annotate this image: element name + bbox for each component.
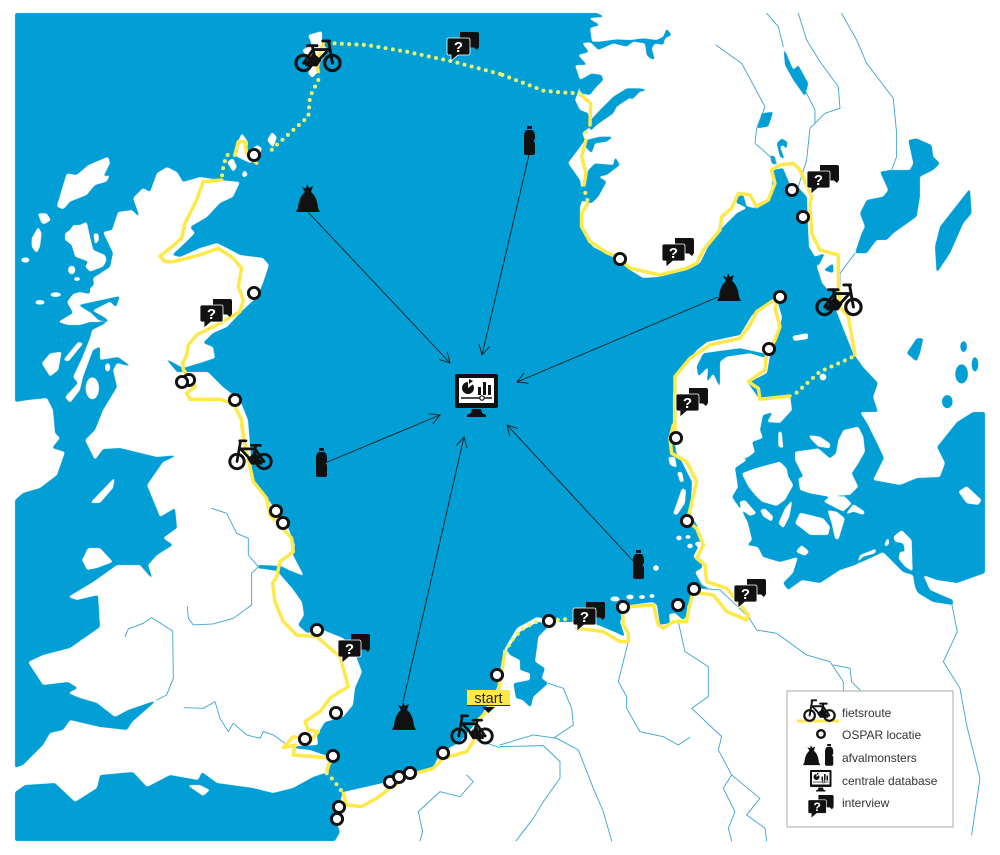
arrow: north-west bag	[307, 211, 450, 363]
icon: interview north: ?	[454, 39, 463, 56]
cycling route	[160, 43, 855, 807]
icon: interview Sweden	[807, 165, 839, 194]
icon: bag north-west	[296, 184, 320, 212]
land: Ireland	[15, 398, 65, 500]
arrow: east bag	[517, 297, 718, 382]
icon: interview Netherlands	[573, 602, 605, 631]
bike icons	[230, 41, 861, 743]
start label: start	[474, 691, 503, 707]
legend: centrale database	[810, 770, 938, 792]
OSPAR locations	[176, 149, 809, 825]
arrow: north bottle	[482, 155, 529, 355]
icon: bike Sweden	[817, 285, 861, 315]
start label	[467, 690, 510, 713]
land: Great Britain	[15, 167, 362, 802]
water: fjords, lakes and inlets	[580, 28, 978, 408]
legend: interview: interview	[842, 796, 890, 810]
legend	[787, 691, 953, 827]
land: Norway and Sweden	[568, 13, 985, 485]
waste sample icons	[296, 126, 741, 730]
arrow: west bottle	[325, 415, 440, 463]
route: Denmark, Sweden and Norway	[500, 74, 855, 430]
icon: interview north	[447, 32, 479, 61]
water: IJsselmeer and delta	[437, 612, 550, 708]
legend: fietsroute	[797, 700, 892, 721]
icon: interview England: ?	[345, 641, 354, 658]
water: Humber	[258, 567, 305, 578]
route: Scotland and Shetland	[160, 43, 500, 430]
icon: interview Scotland	[200, 299, 232, 328]
legend: fietsroute: fietsroute	[842, 706, 892, 720]
legend: afvalmonsters: afvalmonsters	[842, 751, 917, 765]
legend: OSPAR locatie: OSPAR locatie	[842, 728, 921, 742]
icon: bike start	[452, 716, 492, 743]
icon: interview Netherlands: ?	[580, 609, 589, 626]
icon: bike Shetland	[296, 41, 340, 71]
legend: centrale database: centrale database	[842, 774, 938, 788]
icon: bottle south-east	[633, 550, 644, 579]
legend: interview	[808, 795, 890, 818]
land: continent and Jutland	[335, 300, 985, 841]
icon: interview Denmark: ?	[683, 395, 692, 412]
icon: central database monitor	[455, 374, 498, 417]
icon: interview Germany: ?	[741, 586, 750, 603]
interview icons	[200, 32, 839, 663]
islands: Orkney, Shetland, Isle of Man, Anglesey, Wight	[82, 31, 826, 796]
islands: Scotland west	[21, 157, 110, 399]
icon: interview England	[338, 634, 370, 663]
route: Wadden coast and Germany	[500, 425, 748, 682]
legend: interview: ?	[814, 800, 821, 814]
water: Scottish lochs	[78, 296, 120, 322]
icon: bottle west	[316, 448, 327, 477]
icon: bag east	[717, 273, 741, 301]
icon: bike England	[230, 441, 271, 469]
route: England, Belgium and Netherlands	[242, 425, 500, 807]
islands: Denmark and Baltic	[739, 427, 982, 572]
icon: interview Scotland: ?	[207, 306, 216, 323]
arrows to central database	[307, 155, 718, 702]
icon: bottle north	[524, 126, 535, 155]
legend: afvalmonsters	[803, 744, 917, 766]
icon: interview Sweden: ?	[814, 172, 823, 189]
icon: interview Norway: ?	[669, 245, 678, 262]
arrow: south bag	[403, 437, 464, 702]
icon: interview Norway	[662, 238, 694, 267]
icon: bag south	[392, 702, 416, 730]
arrow: south-east bottle	[507, 425, 635, 563]
icon: interview Germany	[734, 579, 766, 608]
icon: interview Denmark	[676, 388, 708, 417]
